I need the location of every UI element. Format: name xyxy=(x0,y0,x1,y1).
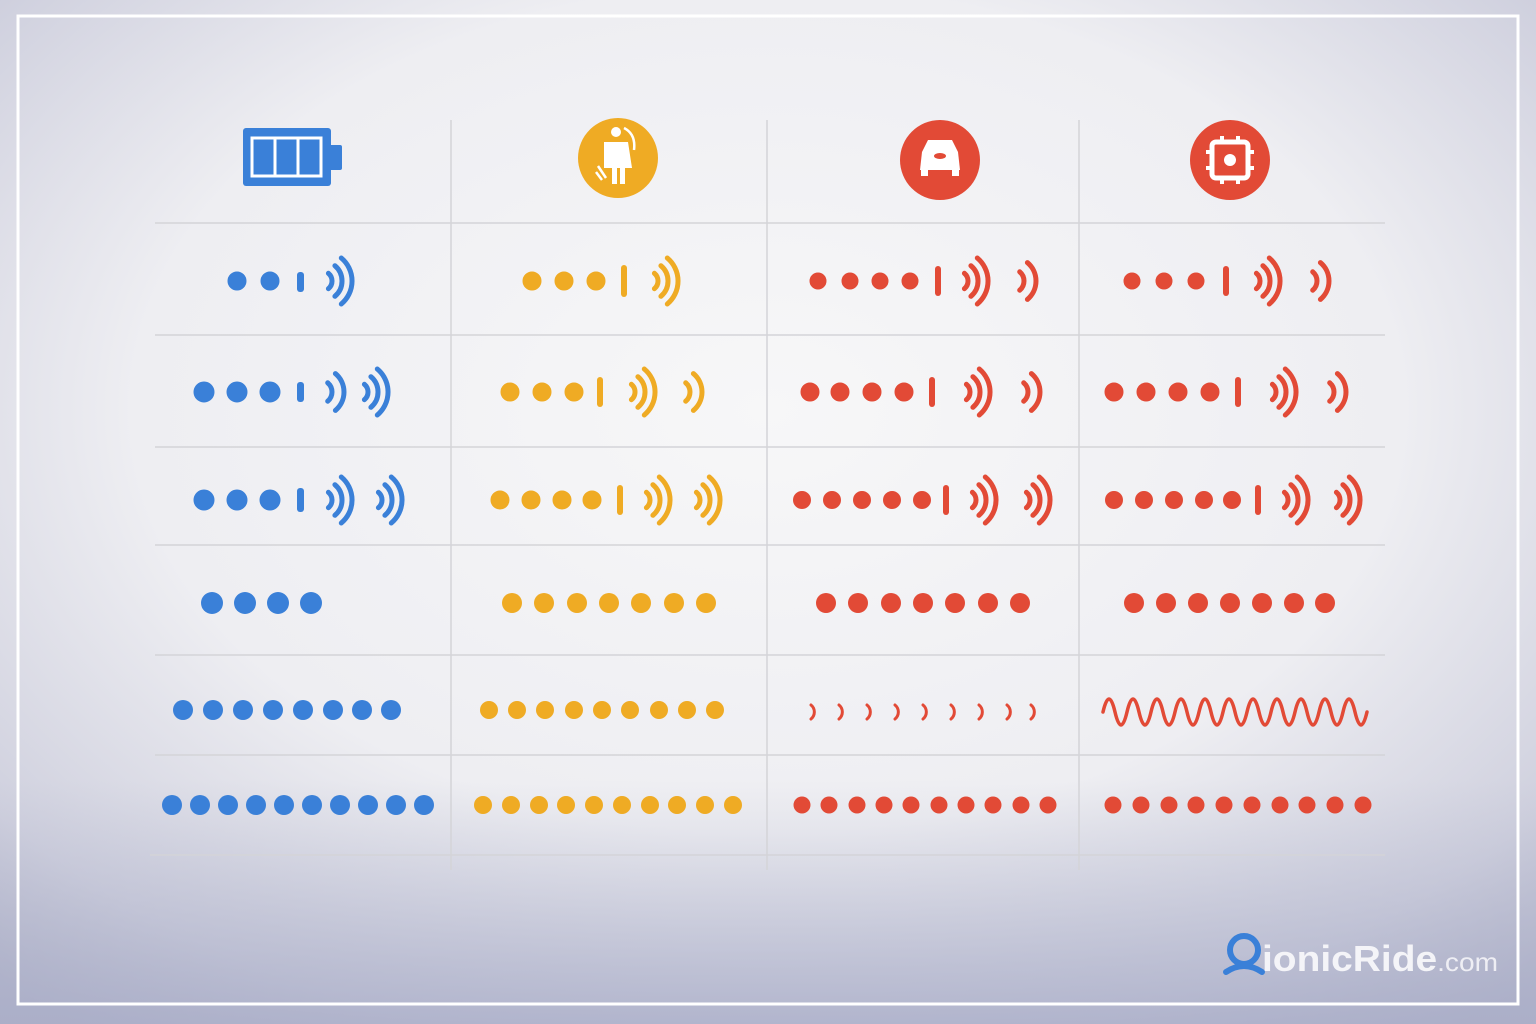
row 4 xyxy=(201,592,1335,614)
icon: chip xyxy=(1190,120,1270,200)
row 1 xyxy=(228,258,1329,304)
icon: car xyxy=(900,120,980,200)
row 2 xyxy=(194,369,1346,415)
row 6 xyxy=(162,795,1372,815)
table grid xyxy=(150,120,1385,870)
icon: person xyxy=(578,118,658,198)
row 5 xyxy=(173,699,1367,725)
icon: battery xyxy=(243,128,342,186)
logo: ionicRide .com xyxy=(1262,938,1498,979)
row 3 xyxy=(194,477,1360,523)
